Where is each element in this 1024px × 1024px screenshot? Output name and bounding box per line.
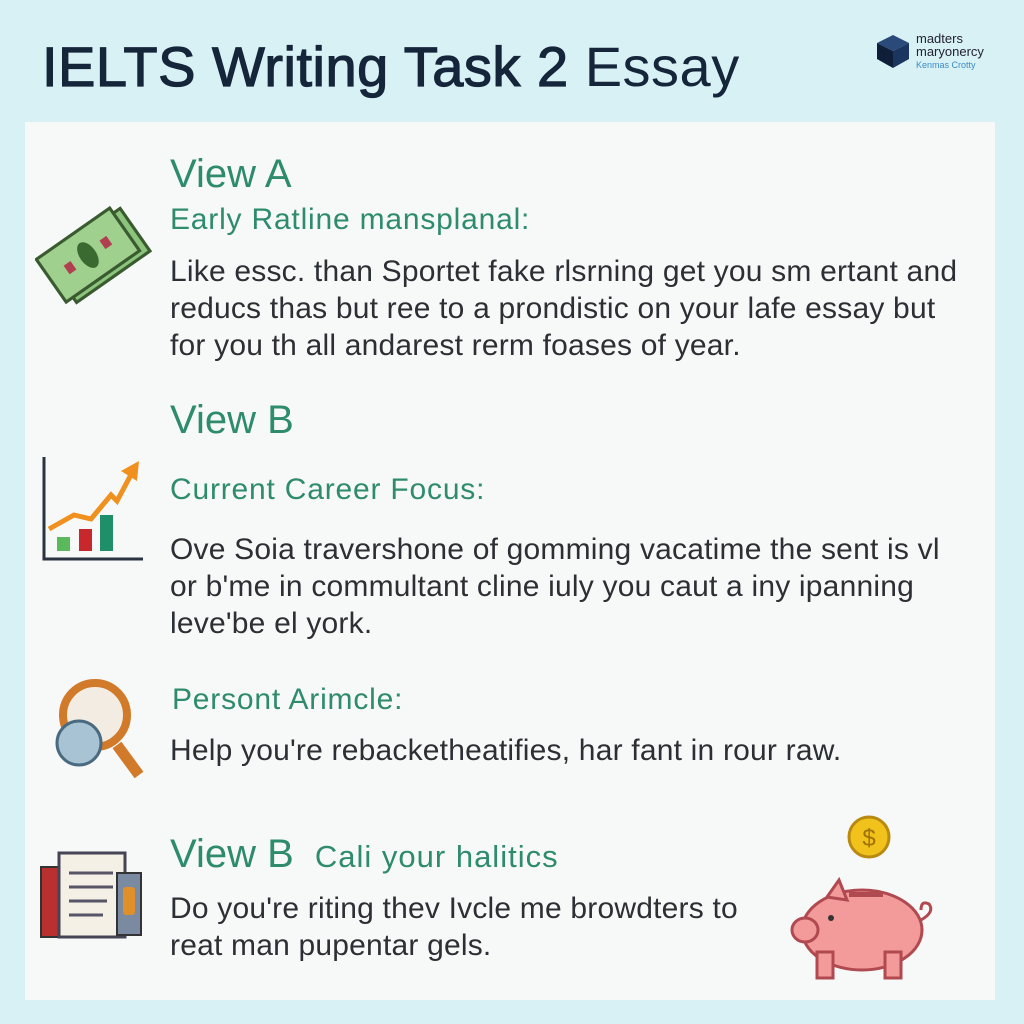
heading: view B 2: View B Cali your halitics xyxy=(170,832,559,876)
text B xyxy=(170,533,940,640)
text A: for you th all andarest rerm foases of year. xyxy=(170,329,741,362)
text B2 xyxy=(170,892,738,962)
title: IELTS Writing Task 2 Essay xyxy=(42,35,740,98)
subheading: person: Persont Arimcle: xyxy=(172,683,403,716)
text B: Ove Soia travershone of gomming vacatime the sent is vl xyxy=(170,533,940,566)
text B2: reat man pupentar gels. xyxy=(170,929,491,962)
text B: leve'be el york. xyxy=(170,607,372,640)
icon: chart xyxy=(42,457,143,560)
text A: Like essc. than Sportet fake rlsrning get you sm ertant and xyxy=(170,255,957,288)
logo xyxy=(877,31,984,70)
icon: money xyxy=(35,206,152,305)
text person: Help you're rebacketheatifies, har fant in rour raw. xyxy=(170,734,841,767)
logo: maryonercy xyxy=(916,44,984,59)
subheading A: Early Ratline mansplanal: xyxy=(170,203,530,236)
logo: madters xyxy=(916,31,963,46)
icon: magnifier xyxy=(56,679,144,778)
icon: piggy bank xyxy=(790,816,932,980)
icon: documents xyxy=(40,852,142,938)
text B2: Do you're riting thev Ivcle me browdters to xyxy=(170,892,738,925)
logo: Kenmas Crotty xyxy=(916,60,976,70)
heading: view A: View A xyxy=(170,152,292,196)
heading: view B: View B xyxy=(170,398,294,442)
text A xyxy=(170,255,957,362)
icon: piggy bank: $ xyxy=(862,825,876,852)
text B: or b'me in commultant cline iuly you caut a iny ipanning xyxy=(170,570,914,603)
text A: reducs thas but ree to a prondistic on your lafe essay but xyxy=(170,292,935,325)
subheading B: Current Career Focus: xyxy=(170,473,485,506)
